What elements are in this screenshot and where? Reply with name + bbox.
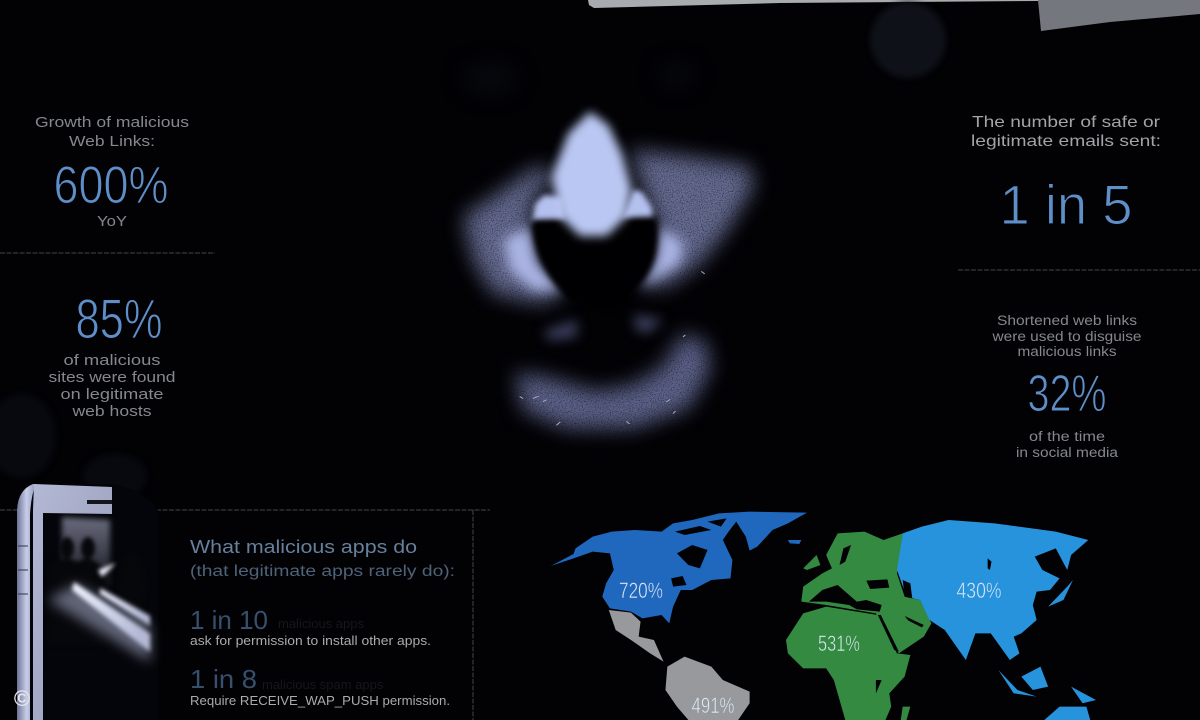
world map bbox=[551, 512, 1096, 720]
region: north america bbox=[551, 512, 807, 623]
panel: malicious apps: malicious spam apps bbox=[262, 677, 384, 692]
note: of the time bbox=[1029, 429, 1105, 444]
map values bbox=[619, 578, 1002, 718]
stat: growth of malicious links bbox=[35, 114, 189, 230]
map values: 491% bbox=[692, 693, 734, 718]
description: malicious links bbox=[1018, 344, 1117, 359]
inland seas and bays bbox=[671, 518, 991, 693]
description: Shortened web links bbox=[997, 313, 1137, 328]
region: europe and africa bbox=[786, 532, 931, 720]
map values: 430% bbox=[956, 578, 1002, 603]
copyright mark: © bbox=[14, 686, 30, 711]
right cheek highlight bbox=[642, 227, 683, 288]
note: in social media bbox=[1016, 445, 1119, 460]
stat: 1 in 10: 1 in 10 bbox=[190, 605, 268, 635]
description: were used to disguise bbox=[991, 329, 1142, 344]
fingerprint: top right bbox=[870, 2, 946, 78]
heading: What malicious apps do bbox=[190, 537, 417, 557]
nose bridge bbox=[552, 112, 632, 236]
map values: 531% bbox=[818, 631, 860, 656]
side edge bbox=[17, 484, 36, 720]
faint eye: left bbox=[463, 63, 517, 93]
description bbox=[48, 352, 176, 420]
region: latin america bbox=[609, 610, 750, 720]
panel: malicious apps: Require RECEIVE_WAP_PUSH permission. bbox=[190, 693, 450, 708]
light beams bbox=[72, 582, 150, 652]
value: 32% bbox=[1028, 365, 1106, 423]
tape strip: top centre bbox=[588, 0, 1038, 8]
label: The number of safe or bbox=[972, 114, 1161, 131]
subheading: (that legitimate apps rarely do): bbox=[190, 563, 455, 580]
stat: shortened links bbox=[991, 313, 1142, 460]
map values: 720% bbox=[619, 578, 663, 603]
left cheek bbox=[463, 167, 567, 303]
stubble specks bbox=[520, 272, 704, 425]
faint eye: right bbox=[660, 63, 693, 87]
top panel bbox=[33, 484, 112, 720]
fingerprint: above phone bbox=[83, 454, 147, 498]
chin stubble bbox=[515, 333, 710, 428]
left cheek highlight bbox=[503, 227, 562, 292]
value: 1 in 5 bbox=[1000, 173, 1132, 236]
side buttons bbox=[18, 546, 28, 594]
description bbox=[991, 313, 1142, 359]
stat: legitimate emails: legitimate emails sent: bbox=[971, 133, 1161, 150]
silhouettes bbox=[48, 537, 146, 645]
face photo bbox=[463, 63, 753, 428]
stat: legitimate emails bbox=[971, 114, 1161, 236]
description: on legitimate bbox=[60, 386, 164, 403]
description: sites were found bbox=[48, 369, 176, 386]
label: Growth of malicious bbox=[35, 114, 189, 131]
region: asia and oceania bbox=[897, 520, 1096, 720]
panel: malicious apps: malicious apps bbox=[278, 616, 364, 631]
description: of malicious bbox=[64, 352, 160, 369]
description: web hosts bbox=[71, 403, 152, 420]
panel: malicious apps: ask for permission to install other apps. bbox=[190, 633, 431, 648]
value: 85% bbox=[76, 287, 162, 350]
stat: 1 in 8: 1 in 8 bbox=[190, 664, 257, 694]
screen wall bbox=[62, 517, 110, 590]
tape strip: top right bbox=[1038, 0, 1200, 31]
nostril highlights bbox=[532, 190, 653, 223]
panel: malicious apps bbox=[190, 537, 455, 708]
fingerprint: left bbox=[0, 394, 56, 478]
phone body bbox=[17, 484, 158, 720]
phone illustration bbox=[14, 484, 158, 720]
note bbox=[1016, 429, 1119, 460]
right cheek bbox=[630, 150, 753, 287]
speaker bbox=[87, 500, 112, 504]
lip glints bbox=[543, 315, 663, 340]
value: 600% bbox=[54, 156, 168, 215]
nose shadow bbox=[532, 217, 657, 310]
light glow bbox=[48, 584, 150, 662]
stat: 85% of malicious sites bbox=[48, 287, 176, 420]
stat: growth of malicious links: Web Links: bbox=[69, 133, 155, 150]
unit: YoY bbox=[97, 213, 127, 230]
